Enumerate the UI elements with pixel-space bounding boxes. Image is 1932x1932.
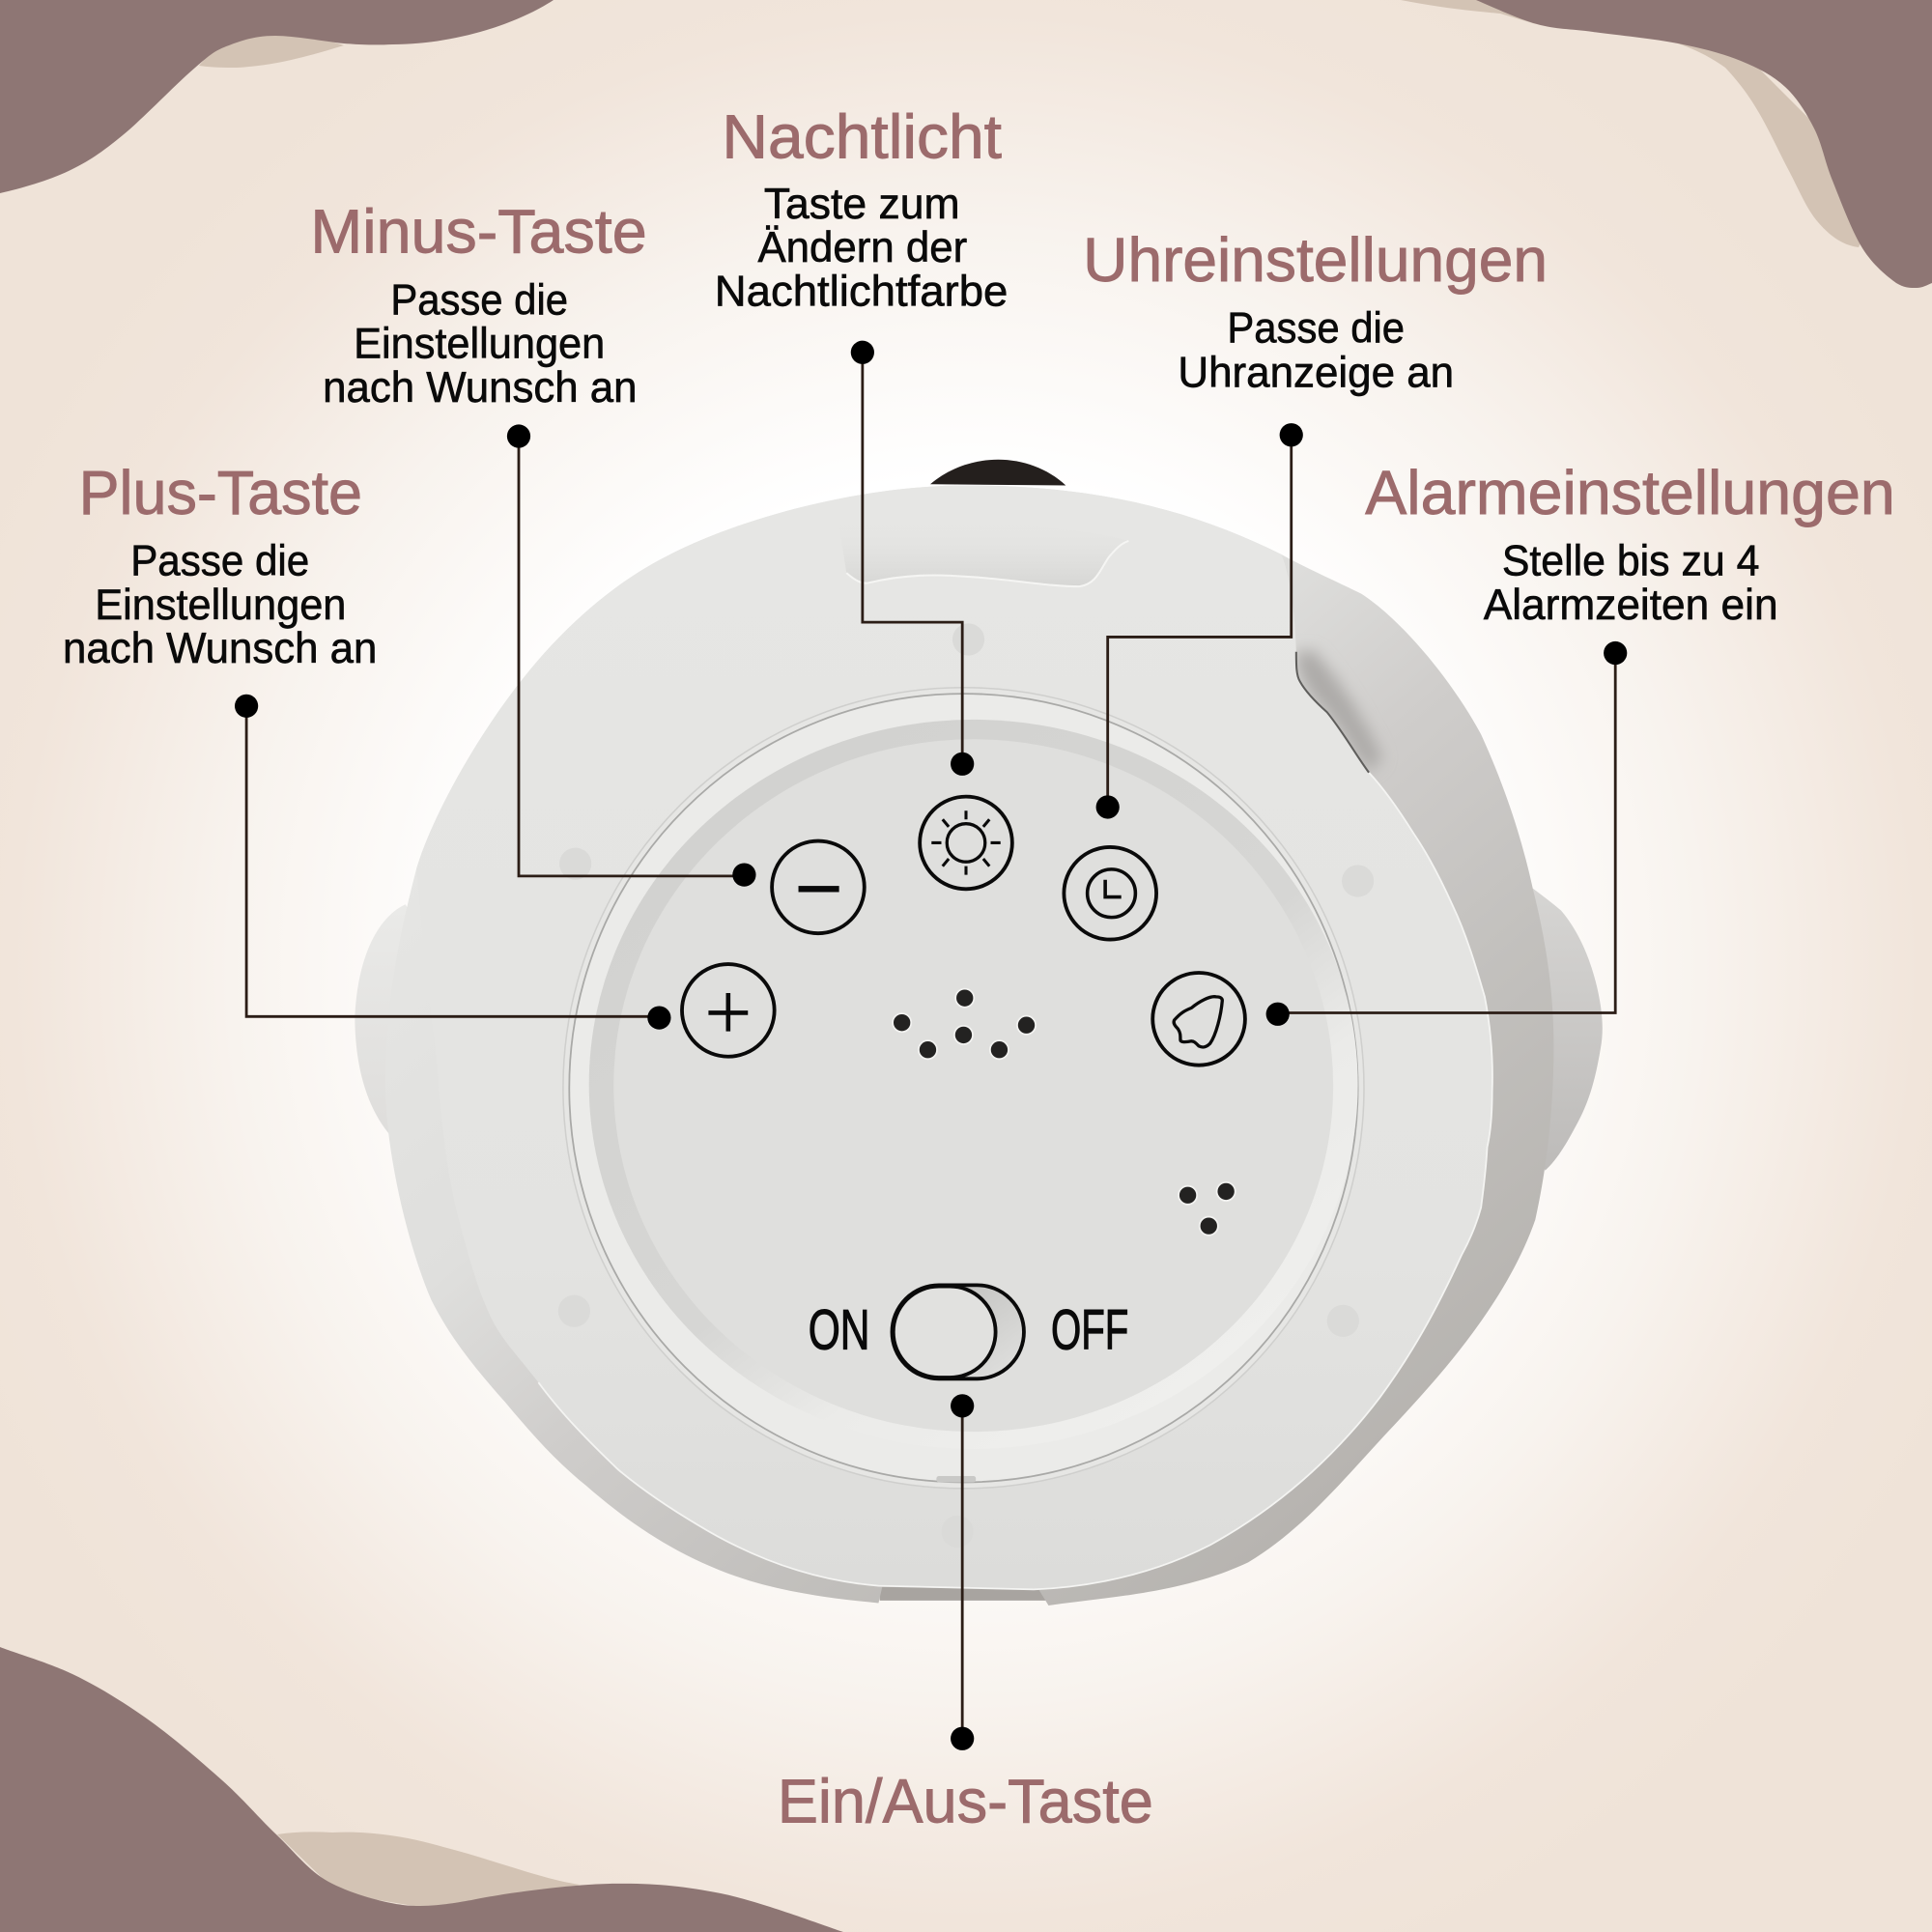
description xyxy=(715,181,1008,315)
description: Passe die xyxy=(1227,305,1405,353)
heading: Nachtlicht xyxy=(722,101,1002,171)
knob on top xyxy=(930,460,1065,486)
description: nach Wunsch an xyxy=(323,364,637,412)
recess rim xyxy=(846,541,1128,586)
groove ring xyxy=(589,720,1358,1449)
description xyxy=(1178,305,1454,397)
button: minus xyxy=(772,841,865,933)
power switch xyxy=(892,1285,1024,1378)
callout: Plus-Taste xyxy=(63,458,377,672)
description: nach Wunsch an xyxy=(63,625,377,672)
corner blob: top right xyxy=(1401,0,1932,288)
leader lines and dots xyxy=(235,341,1627,1750)
top recess xyxy=(838,517,1128,586)
description: Einstellungen xyxy=(95,582,346,629)
button: clock xyxy=(1064,847,1156,940)
leader: Minus-Taste xyxy=(507,424,756,887)
microphone holes xyxy=(1179,1182,1236,1236)
corner blob: bottom left xyxy=(0,1647,843,1932)
description: Uhranzeige an xyxy=(1178,350,1454,397)
description: Passe die xyxy=(390,276,568,324)
description: Stelle bis zu 4 xyxy=(1502,538,1759,585)
front plate xyxy=(416,486,1492,1589)
leader: Uhreinstellungen xyxy=(1096,423,1303,819)
speaker holes xyxy=(893,989,1036,1059)
bottom notch xyxy=(880,1583,1050,1601)
control face ring xyxy=(563,688,1364,1489)
leader: Alarmeinstellungen xyxy=(1266,641,1627,1026)
leader: Plus-Taste xyxy=(235,695,671,1030)
heading: Alarmeinstellungen xyxy=(1365,458,1895,527)
callout: Alarmeinstellungen xyxy=(1365,458,1895,629)
heading: Minus-Taste xyxy=(310,196,647,266)
description: Alarmzeiten ein xyxy=(1484,582,1778,629)
device: alarm clock rear view xyxy=(355,460,1603,1605)
description xyxy=(63,538,377,672)
right ear xyxy=(1528,889,1603,1171)
callout: Uhreinstellungen xyxy=(1083,225,1548,397)
callout: Nachtlicht xyxy=(715,101,1008,315)
callout: Minus-Taste xyxy=(310,196,647,412)
heading: Uhreinstellungen xyxy=(1083,225,1548,295)
description: Nachtlichtfarbe xyxy=(715,268,1008,315)
description: Ändern der xyxy=(757,224,967,271)
description xyxy=(1484,538,1778,629)
heading: Ein/Aus-Taste: Ein/Aus-Taste xyxy=(778,1766,1153,1835)
plate gap edge xyxy=(1296,652,1369,773)
leader: Ein/Aus-Taste xyxy=(951,1394,974,1750)
plate edge highlight xyxy=(538,773,1492,1589)
left ear xyxy=(355,904,425,1141)
label: ON: ON xyxy=(809,1299,870,1362)
leader: Nachtlicht xyxy=(851,341,974,776)
shell gap shadow xyxy=(1296,650,1382,773)
description: Einstellungen xyxy=(354,321,605,368)
screw marks xyxy=(558,623,1374,1548)
inner disc xyxy=(613,739,1333,1432)
button: alarm bell xyxy=(1152,973,1245,1065)
description xyxy=(323,276,637,412)
button: plus xyxy=(682,964,775,1057)
heading: Plus-Taste xyxy=(79,458,362,527)
label: OFF: OFF xyxy=(1051,1299,1128,1362)
description: Taste zum xyxy=(764,181,960,228)
description: Passe die xyxy=(130,538,309,585)
outer shell xyxy=(385,486,1553,1605)
bottom clip xyxy=(936,1476,976,1482)
corner blob: top left xyxy=(0,0,554,193)
button: night light xyxy=(920,797,1012,889)
